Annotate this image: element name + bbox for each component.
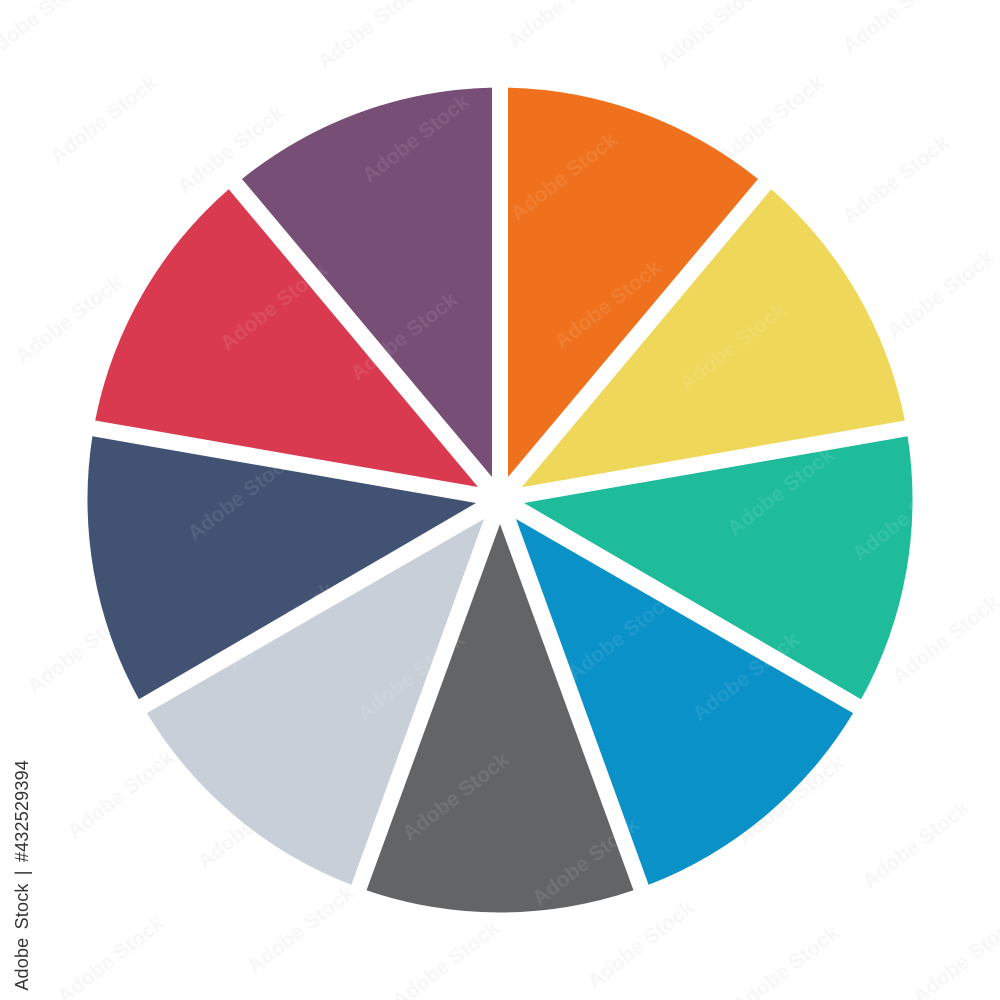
segment: yellow [522, 189, 905, 487]
watermark layer over pie chart: Adobe Stock [223, 578, 339, 675]
watermark layer over pie chart: Adobe Stock [216, 258, 332, 355]
watermark layer over pie chart: Adobe Stock [346, 288, 462, 385]
watermark layer on white background: Adobe Stock [883, 246, 999, 343]
watermark layer over pie chart: Adobe Stock [723, 443, 839, 540]
watermark layer on white background: Adobe Stock [63, 746, 179, 843]
segment: purple [242, 88, 492, 477]
watermark layer on white background: Adobe Stock [243, 881, 359, 978]
watermark layer over pie chart: Adobe Stock [563, 588, 679, 685]
watermark layer over pie chart: Adobe Stock [550, 256, 666, 353]
watermark layer over pie chart: Adobe Stock [506, 128, 622, 225]
watermark layer on white background: Adobe Stock [838, 131, 954, 228]
segment: blue [516, 519, 853, 885]
pie chart [87, 88, 913, 913]
watermark layer over pie chart: Adobe Stock [358, 90, 474, 187]
watermark layer on white background: Adobe Stock [713, 71, 829, 168]
watermark layer on white background: Adobe Stock [173, 101, 289, 198]
segment: dark gray [366, 524, 634, 913]
watermark layer over pie chart: Adobe Stock [675, 298, 791, 395]
watermark layer over pie chart [183, 90, 964, 910]
watermark layer over pie chart: Adobe Stock [528, 813, 644, 910]
watermark layer on white background: Adobe Stock [46, 71, 162, 168]
watermark layer on white background: Adobe Stock [858, 796, 974, 893]
watermark layer over pie chart: Adobe Stock [183, 448, 299, 545]
segment: light gray [147, 519, 484, 885]
watermark layer over pie chart: Adobe Stock [688, 628, 804, 725]
segment: navy [87, 436, 476, 699]
segment: red [95, 189, 478, 487]
watermark layer over pie chart: Adobe Stock [353, 628, 469, 725]
segment: orange [508, 88, 758, 477]
watermark layer on white background: Adobe Stock [23, 601, 139, 698]
segment: teal [524, 436, 913, 699]
watermark layer over pie chart: Adobe Stock [398, 748, 514, 845]
watermark layer on white background: Adobe Stock [733, 751, 849, 848]
watermark layer on white background: Adobe Stock [583, 896, 699, 993]
watermark layer over pie chart: Adobe Stock [848, 468, 964, 565]
watermark layer on white background: Adobe Stock [11, 271, 127, 368]
stock id text: Adobe Stock | #432529394 [12, 760, 32, 991]
watermark layer on white background: Adobe Stock [193, 776, 309, 873]
